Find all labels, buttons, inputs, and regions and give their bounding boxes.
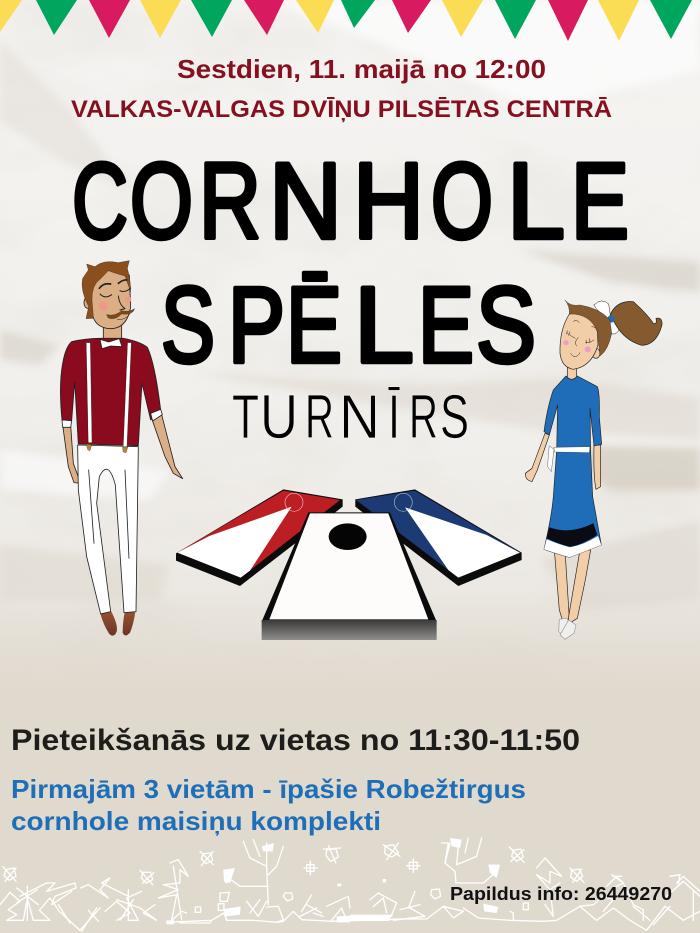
title: CORNHOLE: O — [130, 140, 193, 261]
woman: hem stripes — [544, 523, 601, 557]
title: TURNĪRS: N — [339, 383, 380, 452]
woman: neck — [567, 367, 577, 380]
man: hair — [82, 261, 131, 319]
title: CORNHOLE: L — [507, 140, 565, 261]
woman: arms — [525, 433, 601, 489]
man: suspenders — [86, 343, 131, 453]
title: TURNĪRS: R — [305, 383, 334, 452]
illustration: cornhole boards — [176, 489, 522, 640]
prizes text: cornhole maisiņu komplekti — [11, 806, 381, 836]
woman: ponytail — [610, 301, 662, 345]
man: smile — [117, 314, 130, 320]
woman: hair — [565, 300, 612, 356]
title: TURNĪRS: R — [409, 383, 438, 452]
title: SPĒLES: S — [476, 264, 536, 385]
date line: Sestdien, 11. maijā no 12:00 — [177, 54, 546, 84]
title: SPĒLES: L — [354, 264, 414, 385]
centre board — [262, 512, 437, 640]
man: bow tie — [100, 339, 122, 349]
man: shirt — [60, 338, 161, 446]
contact info: Papildus info: 26449270 — [450, 884, 672, 904]
woman: legs — [554, 550, 591, 623]
title: CORNHOLE: E — [571, 140, 629, 261]
title: SPĒLES: Ē — [286, 264, 342, 385]
woman: facial features — [567, 320, 597, 357]
title: CORNHOLE: N — [269, 140, 342, 261]
title: CORNHOLE: O — [431, 140, 493, 261]
title: TURNĪRS: S — [440, 383, 469, 452]
woman: blush — [563, 340, 591, 352]
woman: bow — [594, 301, 621, 334]
man: neck — [103, 325, 122, 341]
man: ear — [84, 297, 91, 308]
title: TURNĪRS: Ī — [388, 383, 400, 452]
folk ornament: solid details — [167, 843, 350, 924]
prizes text — [11, 774, 526, 836]
title: CORNHOLE: C — [72, 140, 128, 261]
man: cuffs — [62, 409, 162, 427]
title: CORNHOLE: H — [353, 140, 424, 261]
left red board — [176, 489, 343, 586]
registration text: Pieteikšanās uz vietas no 11:30-11:50 — [11, 724, 580, 757]
location line: VALKAS-VALGAS DVĪŅU PILSĒTAS CENTRĀ — [71, 96, 612, 123]
woman: belt — [548, 446, 590, 472]
woman: shoes — [559, 618, 576, 639]
man: head — [91, 270, 131, 329]
prizes text: Pirmajām 3 vietām - īpašie Robežtirgus — [11, 774, 526, 804]
title: TURNĪRS: T — [232, 383, 259, 452]
right blue board — [355, 489, 522, 586]
man: trousers — [78, 445, 138, 614]
title: TURNĪRS: U — [260, 383, 298, 452]
bunting flags — [0, 0, 692, 41]
man: eyes and nose — [100, 288, 131, 310]
man: shoes — [100, 611, 135, 636]
folk ornament: right solid details — [350, 838, 500, 921]
woman: face — [560, 313, 598, 369]
illustration: woman — [525, 300, 662, 639]
woman: ear — [592, 348, 600, 358]
man: brows — [99, 280, 127, 288]
decorative folk ornament: left half — [0, 840, 350, 931]
title: SPĒLES: P — [228, 264, 285, 385]
title: SPĒLES: E — [418, 264, 474, 385]
man: moustache — [107, 309, 135, 319]
title: CORNHOLE: R — [199, 140, 261, 261]
illustration: man — [60, 261, 183, 636]
woman: dress — [544, 376, 602, 557]
decorative folk ornament: right half — [350, 838, 700, 930]
man: arms — [63, 413, 183, 483]
man: blush — [99, 296, 131, 311]
title: SPĒLES: S — [161, 264, 215, 385]
woman: hair tie — [607, 315, 615, 323]
